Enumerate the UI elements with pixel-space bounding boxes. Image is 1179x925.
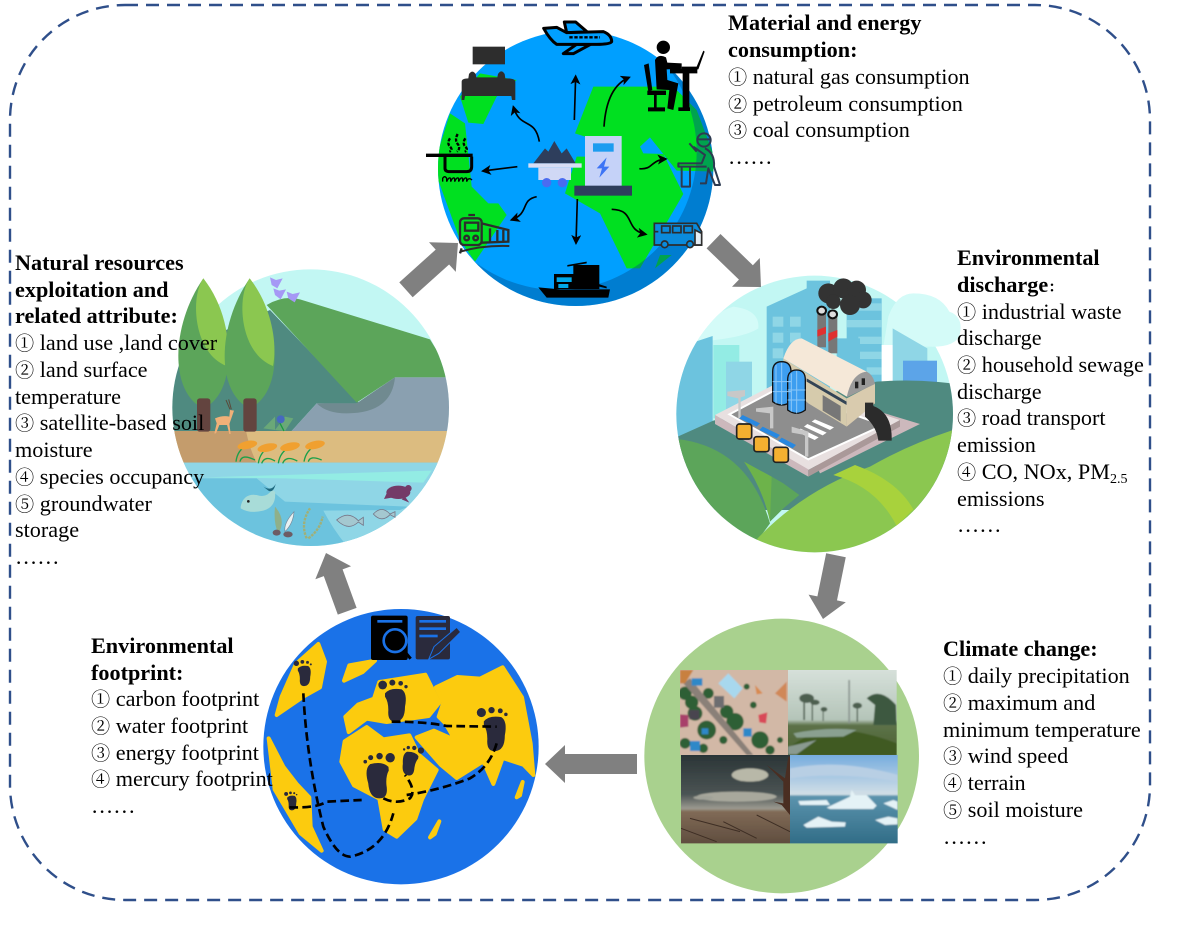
flow arrows [483, 76, 666, 243]
circle: factory scene [670, 276, 963, 563]
text: environmental discharge: ③ road transport [957, 405, 1106, 430]
text: climate change: Climate change: [943, 636, 1098, 661]
text: environmental discharge: emissions [957, 486, 1045, 511]
photo: hurricane palms [788, 670, 897, 755]
arrow: discharge to climate [804, 552, 855, 623]
text: climate change: ⑤ soil moisture [943, 797, 1083, 822]
icon: bus [654, 223, 702, 248]
text: material and energy consumption: consumption: [728, 37, 857, 62]
text: material and energy consumption: Material and energy [728, 10, 921, 35]
text: environmental footprint [91, 633, 274, 818]
text: natural resources: temperature [15, 384, 121, 409]
text: natural resources: ③ satellite-based soil [15, 410, 204, 435]
blue tanks [773, 362, 805, 413]
text: environmental discharge: discharge [957, 379, 1042, 404]
text: environmental discharge: …… [957, 512, 1001, 537]
icon: search document [371, 616, 411, 660]
text: environmental footprint: ① carbon footprint [91, 686, 260, 711]
wheat [236, 439, 326, 463]
continents [433, 73, 720, 268]
text: material and energy consumption: ① natural gas consumption [728, 64, 970, 89]
turtle [384, 485, 412, 503]
text: material and energy consumption: ③ coal consumption [728, 117, 910, 142]
text: climate change: …… [943, 824, 987, 849]
black pipe [865, 403, 892, 441]
text: material and energy consumption: …… [728, 144, 772, 169]
whale [241, 484, 276, 512]
globe: environmental footprint [263, 609, 539, 884]
arrow: climate to footprint [545, 745, 637, 783]
text: environmental discharge: Environmental [957, 245, 1100, 270]
footprints [284, 660, 508, 810]
shaded crescent [475, 69, 714, 306]
text: environmental discharge [957, 245, 1144, 537]
icon: worker at bench [678, 133, 720, 187]
text: climate change [943, 636, 1141, 849]
smoke cloud [818, 278, 872, 315]
text: material and energy consumption: ② petroleum consumption [728, 91, 963, 116]
globe: material and energy consumption [426, 20, 721, 306]
text: environmental footprint: ④ mercury footprint [91, 766, 274, 791]
text: natural resources: Natural resources [15, 250, 184, 275]
text: environmental footprint: Environmental [91, 633, 234, 658]
text: environmental discharge: discharge [957, 325, 1042, 350]
text: natural resources: ② land surface [15, 357, 148, 382]
continents [269, 644, 533, 851]
text: climate change: ③ wind speed [943, 743, 1068, 768]
cloud beyond circle edge [883, 293, 961, 347]
circle: climate photos [644, 619, 919, 893]
arrow: footprint to natural resources [308, 547, 365, 618]
text: climate change: minimum temperature [943, 717, 1141, 742]
text: natural resources: storage [15, 517, 79, 542]
text: natural resources: ① land use ,land cover [15, 330, 218, 355]
chimneys [817, 307, 837, 353]
tree right [225, 278, 275, 432]
photo: flooded village [680, 670, 788, 755]
icon: cargo ship [538, 262, 610, 298]
icon: notepad and pen [416, 616, 461, 659]
photo: drought [681, 755, 790, 844]
icon: cooking pot [426, 134, 473, 182]
text: environmental discharge: discharge： [957, 272, 1062, 297]
dashed travel routes [289, 693, 497, 857]
text: environmental footprint: …… [91, 793, 135, 818]
city backdrop [670, 281, 963, 563]
icon: airplane [544, 22, 612, 54]
text: environmental discharge: emission [957, 432, 1036, 457]
icon: mine cart [528, 141, 582, 187]
text: natural resources: moisture [15, 437, 93, 462]
text: climate change: ① daily precipitation [943, 663, 1130, 688]
circle: natural resources landscape [160, 269, 460, 550]
arrow: natural resources to consumption [393, 228, 471, 305]
text: climate change: ④ terrain [943, 770, 1026, 795]
arrow: consumption to discharge [700, 227, 775, 301]
icon: charging station [574, 136, 632, 196]
text: natural resources: …… [15, 544, 59, 569]
icon: sofa and TV [462, 47, 515, 100]
text: natural resources: related attribute: [15, 303, 178, 328]
text: environmental discharge: ① industrial waste [957, 299, 1122, 324]
tree left [178, 278, 228, 432]
factory building [783, 338, 875, 427]
text: environmental footprint: footprint: [91, 660, 183, 685]
icon: person at desk [644, 41, 705, 111]
text: climate change: ② maximum and [943, 690, 1095, 715]
factory platform [715, 382, 920, 477]
text: natural resources [15, 250, 218, 569]
landscape layers [160, 298, 460, 550]
birds [270, 277, 300, 302]
text: natural resources: ④ species occupancy [15, 464, 204, 489]
text: environmental discharge: ② household sewage [957, 352, 1144, 377]
text: natural resources: ⑤ groundwater [15, 491, 152, 516]
fish [337, 509, 395, 526]
photo: melting icebergs [790, 755, 898, 844]
deer [214, 399, 234, 434]
icon: train [460, 215, 509, 253]
text: natural resources: exploitation and [15, 277, 169, 302]
text: environmental footprint: ② water footprint [91, 713, 249, 738]
warning signs [737, 415, 796, 462]
text: environmental discharge: 2.5 [1110, 472, 1127, 487]
text: environmental discharge: ④ CO, NOx, PM [957, 459, 1110, 484]
text: material and energy consumption [728, 10, 970, 169]
flowers [263, 415, 293, 431]
lamp posts [727, 390, 808, 457]
seaweed and stones [273, 507, 323, 538]
text: environmental footprint: ③ energy footprint [91, 740, 260, 765]
